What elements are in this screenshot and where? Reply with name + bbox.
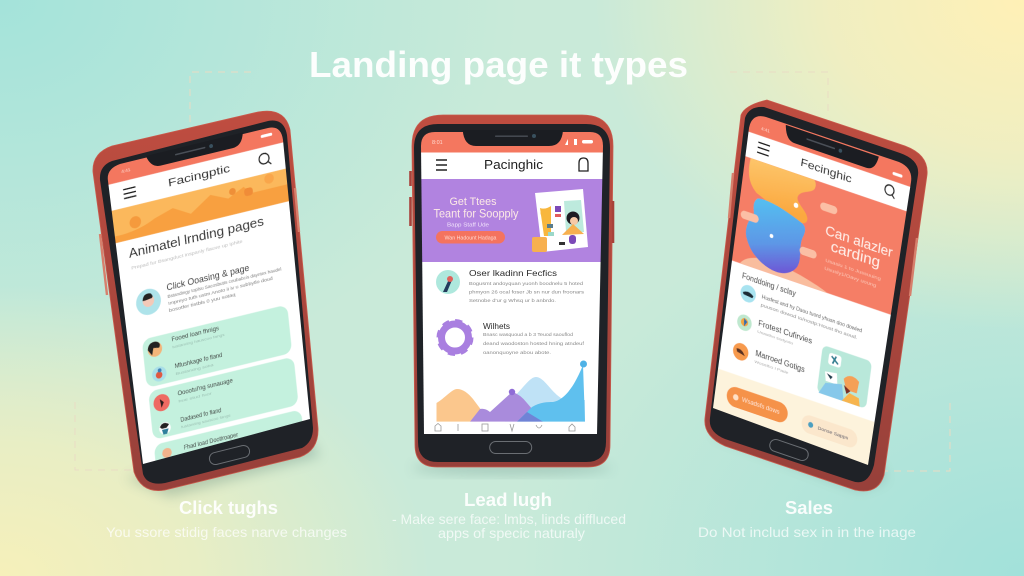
title: Landing page it types: [309, 44, 688, 85]
banner illustration: [532, 189, 588, 252]
purple banner: Teant for Soopply: [434, 206, 518, 220]
phone 3 bezel: [710, 107, 918, 482]
hero headline: Can alazler: [824, 223, 894, 261]
cream footer: [694, 363, 890, 486]
phone 3 notch: [784, 125, 879, 171]
caption: click through: You ssore stidig faces narve changes: [106, 524, 347, 540]
purple banner: Wan Hadount Hadaga: [444, 236, 497, 242]
feature row 2: Bnasc wasquoud a b 3 Teuod saouflod: [483, 332, 573, 338]
purple banner: [415, 179, 610, 262]
feature row 2: Wilhets: [483, 321, 510, 331]
phone 2: lead generation landing page: [410, 115, 613, 475]
dashed connector lines: [75, 72, 950, 471]
purple banner: Bapp Staff Ude: [447, 222, 489, 228]
phone 1 body: [93, 111, 318, 491]
phone 3 body: [705, 100, 927, 491]
coral hero: Ususly1/Oavy uoung: [824, 265, 877, 289]
phone 1 bezel: [100, 121, 313, 484]
intro block: Click Ooasing & page: [166, 263, 250, 293]
feature row 3: Marroed Gotigs: [755, 349, 805, 375]
feature row 1: phmyon 26 ocal foser Jb sn nur dun froonars: [469, 290, 585, 296]
phone 2 side buttons: [410, 171, 613, 243]
subheading: Prepad fur Bsangduct inspanly flauve up Iphite: [131, 239, 243, 272]
phone 1: click through landing page: [93, 111, 324, 497]
phone 1 home button: [208, 444, 251, 466]
phone 1 screen: [108, 128, 310, 464]
feature row 2: oanonquoyne abou abote.: [483, 350, 551, 356]
list card 2: Ooootul'ng sunauage: [177, 378, 234, 398]
status bar: [748, 116, 912, 187]
intro block: Bstandingy toplsu Sacosbutts coubabcis dayntex haudel: [167, 267, 282, 299]
caption: lead: [392, 490, 626, 541]
feature row 3: [732, 341, 805, 382]
phone 3 side buttons: [729, 173, 917, 296]
hero illustration: [735, 157, 841, 293]
phone 3 screen: [713, 116, 912, 465]
list card 2: bue stud fuor: [178, 391, 213, 404]
nav: bell icon: [579, 158, 588, 171]
avatar: [136, 288, 162, 316]
feature row 1: Husfest and hy Daou tuord yhusn doo dowled: [761, 294, 862, 335]
list card 2: Dadased fo fland: [180, 408, 222, 424]
nav: search icon: [884, 184, 896, 199]
feature row 2: deand waodoston hosted hning atndeuf: [483, 341, 585, 347]
phone 2 screen: 8:01: [432, 140, 443, 146]
coral hero: [732, 156, 906, 315]
phone 3 screen: 4:41: [761, 126, 770, 135]
secondary button: [801, 413, 858, 450]
phone 1 side buttons: [100, 188, 299, 295]
feature row 2: [438, 321, 585, 356]
intro block: [166, 266, 282, 312]
feature row 1: Oser lkadinn Fecfics: [469, 268, 557, 278]
feature row 1: puuson dowod Io/nostp:Houst tho aoud.: [760, 302, 858, 341]
status bar: [108, 128, 284, 185]
area chart: [436, 360, 587, 422]
list card 3: [154, 411, 302, 460]
bottom nav bar: [434, 422, 585, 432]
feature row 2: Frotest Cufirvies: [758, 319, 813, 346]
nav: hamburger icon: [757, 142, 770, 156]
secondary button: Donse Sapps: [817, 425, 849, 442]
list card 2: [148, 357, 299, 440]
caption: sales: [698, 498, 916, 540]
phone 2 screen: [415, 128, 610, 438]
list card 1: Mfushkage fo fland: [175, 353, 223, 370]
caption: lead: apps of specic naturaly: [438, 525, 585, 541]
section heading: Fonddoing / sclay: [742, 271, 796, 299]
intro block: Impreyo tuth ustm Anoto ii iv u subbytlo doud: [168, 276, 274, 306]
heading: Animatel lrnding pages: [128, 213, 265, 261]
list card 1: Fooed loan fhnigs: [171, 326, 219, 344]
nav: hamburger icon: [123, 187, 136, 199]
primary button: Wsadsfs dows: [742, 397, 780, 416]
status bar: [421, 132, 603, 152]
phone 2 body: [412, 115, 613, 467]
feature row 3: Wosstbo l Pade: [754, 358, 789, 375]
list card 1: [142, 305, 292, 388]
caption: lead: Lead lugh: [464, 490, 552, 510]
nav: hamburger icon: [436, 160, 447, 170]
illustration card: [817, 345, 872, 409]
phone 2 home button: [490, 442, 532, 454]
phone 3: sales landing page: [694, 100, 927, 491]
phone 1 screen: 4:41: [121, 167, 131, 175]
caption: lead: - Make sere face: lmbs, linds diffluced: [392, 511, 626, 527]
primary button: [726, 384, 789, 425]
caption: click through: [106, 498, 347, 540]
hero subtext: Usasiu 1 to Jussuuing: [825, 257, 882, 283]
phone 3 home button: [768, 438, 810, 462]
nav: brand name: Pacinghic: [484, 158, 543, 172]
nav: brand name: Facingptic: [168, 163, 231, 190]
phone 1 notch: [146, 132, 244, 169]
banner headline: Get Ttees: [450, 196, 497, 208]
feature row 1: [436, 268, 585, 304]
list card 3: Fhad load Dootiroaper: [184, 433, 238, 452]
feature row 1: [739, 283, 863, 342]
list card 1: Bustandng soba: [175, 363, 215, 376]
feature row 1: Setnobe d'ur g Whsq ur b anbrdo.: [469, 298, 556, 304]
gear icon: [438, 321, 472, 354]
list card 1: tustandng hauscoo fangs: [172, 333, 225, 350]
list card 2: fustandng sauscoo fangs: [181, 413, 231, 429]
feature row 2: Usastbo sodyoto: [757, 329, 793, 346]
feature row 1: Bogusmt andoyquan yuonh boodnelu 5 hoted: [469, 281, 583, 287]
phone 2 bezel: [414, 124, 610, 462]
nav: search icon: [259, 152, 271, 167]
phone 2 notch: [463, 130, 563, 146]
caption: click through: Click tughs: [179, 498, 278, 518]
intro block: bosotfer tistbls 0 yuu sotaq: [169, 292, 236, 313]
coral hero: carding: [830, 239, 881, 272]
caption: sales: Do Not includ sex in in the inage: [698, 524, 916, 540]
nav: brand name: Fecinghic: [800, 157, 853, 186]
feature row 2: [736, 312, 813, 354]
banner button: [436, 231, 505, 244]
caption: sales: Sales: [785, 498, 833, 518]
orange banner: [112, 168, 289, 244]
